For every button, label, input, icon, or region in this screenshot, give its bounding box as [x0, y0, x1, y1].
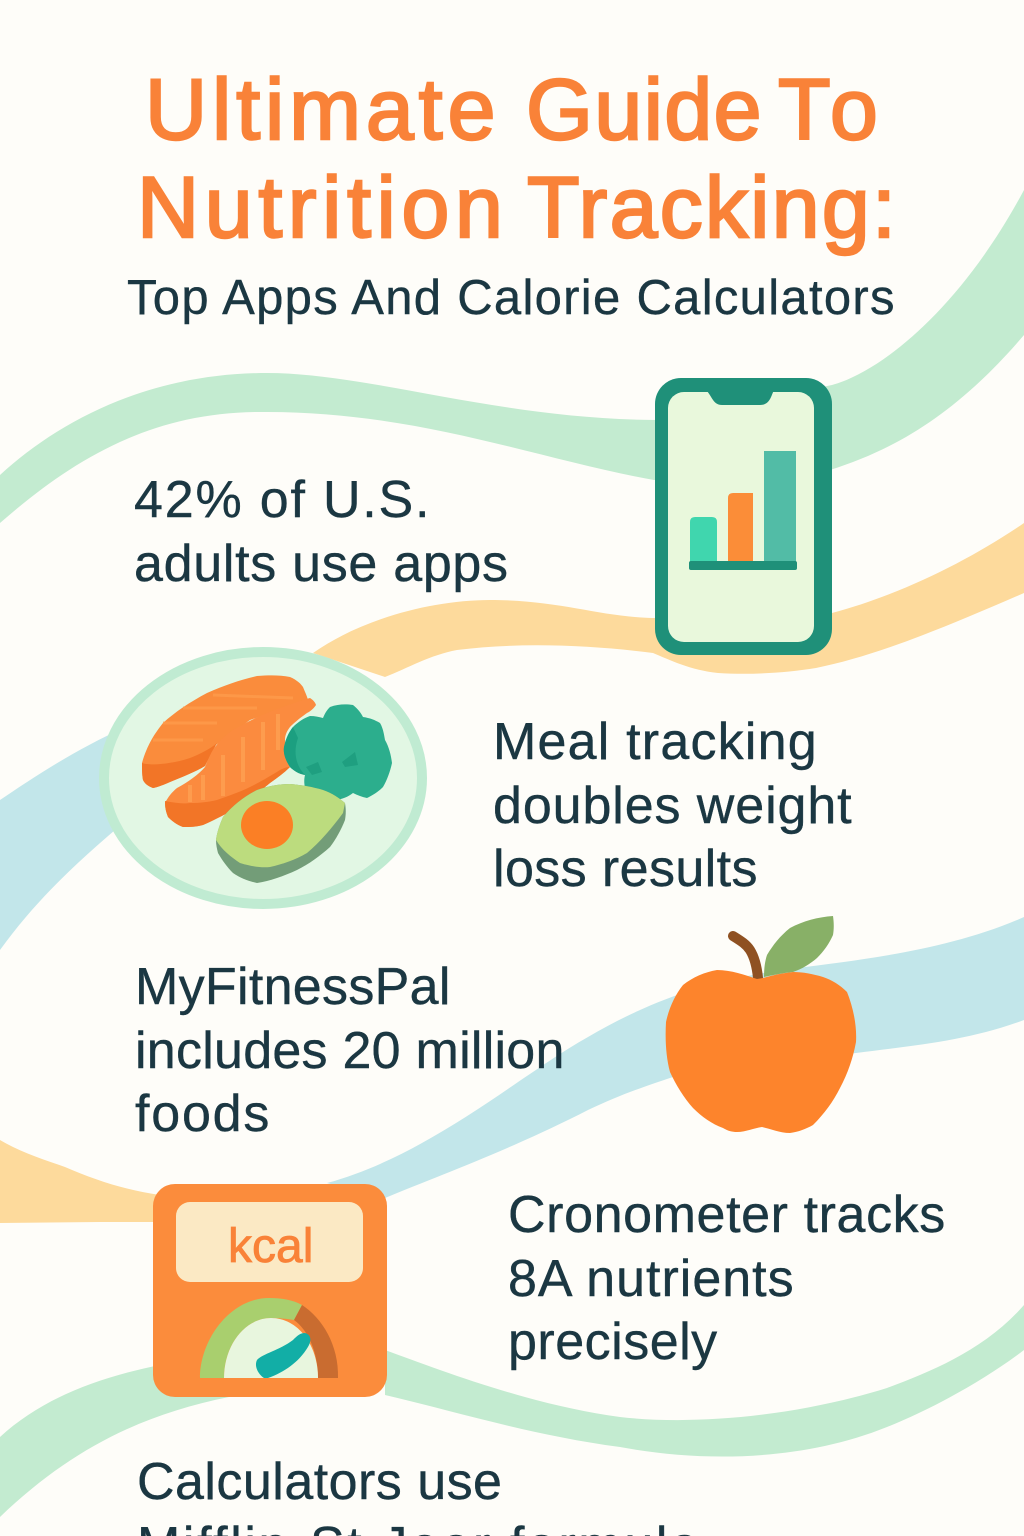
stat: app usage — [134, 471, 509, 592]
salmon back — [142, 675, 308, 788]
stat: MyFitnessPal — [135, 958, 565, 1143]
stat: app usage: 42% of U.S. — [134, 471, 431, 529]
wave: lower green — [0, 1305, 1024, 1517]
stat: calculators — [137, 1453, 702, 1536]
title: Ultimate — [145, 62, 500, 158]
title: Guide — [526, 62, 763, 158]
stat: calculators: Calculators use — [137, 1453, 502, 1511]
stat: Cronometer: precisely — [508, 1313, 718, 1371]
title: To — [778, 62, 887, 158]
broccoli — [284, 704, 392, 800]
title: Nutrition — [137, 160, 509, 256]
stat: Cronometer: 8A nutrients — [508, 1250, 795, 1308]
wave: upper green — [0, 190, 1024, 523]
icon: phone with bar chart — [655, 378, 832, 655]
stat: MyFitnessPal: includes 20 million — [135, 1022, 565, 1080]
salmon front — [165, 698, 316, 827]
stat: meal tracking: Meal tracking — [493, 713, 818, 771]
wave: orange left — [0, 1140, 160, 1223]
gauge needle — [256, 1333, 310, 1378]
stat: app usage: adults use apps — [134, 534, 509, 592]
bar: teal — [690, 517, 717, 563]
apple leaf — [764, 916, 834, 977]
gauge — [200, 1298, 302, 1378]
stat: meal tracking: doubles weight — [493, 776, 853, 834]
wave: orange — [313, 523, 1024, 677]
bar: orange — [728, 493, 753, 563]
apple stem — [733, 936, 758, 978]
title — [137, 62, 898, 256]
stat: Cronometer: Cronometer tracks — [508, 1186, 946, 1244]
stat: meal tracking — [493, 713, 853, 898]
stat: meal tracking: loss results — [493, 840, 758, 898]
wave: blue left — [0, 725, 130, 950]
stat: MyFitnessPal: foods — [135, 1085, 271, 1143]
stat: Cronometer — [508, 1186, 946, 1371]
wave: blue right — [327, 917, 1024, 1198]
stat: MyFitnessPal: MyFitnessPal — [135, 958, 451, 1016]
icon: kcal meter — [153, 1184, 387, 1397]
icon: apple — [666, 916, 856, 1133]
kcal label: kcal — [228, 1220, 313, 1273]
avocado pit — [241, 801, 293, 849]
subtitle: Top Apps And Calorie Calculators — [127, 271, 896, 325]
bar: green — [764, 451, 796, 563]
icon: plate with salmon, broccoli and avocado — [104, 652, 422, 904]
title: Tracking: — [527, 160, 898, 256]
avocado — [216, 784, 346, 883]
